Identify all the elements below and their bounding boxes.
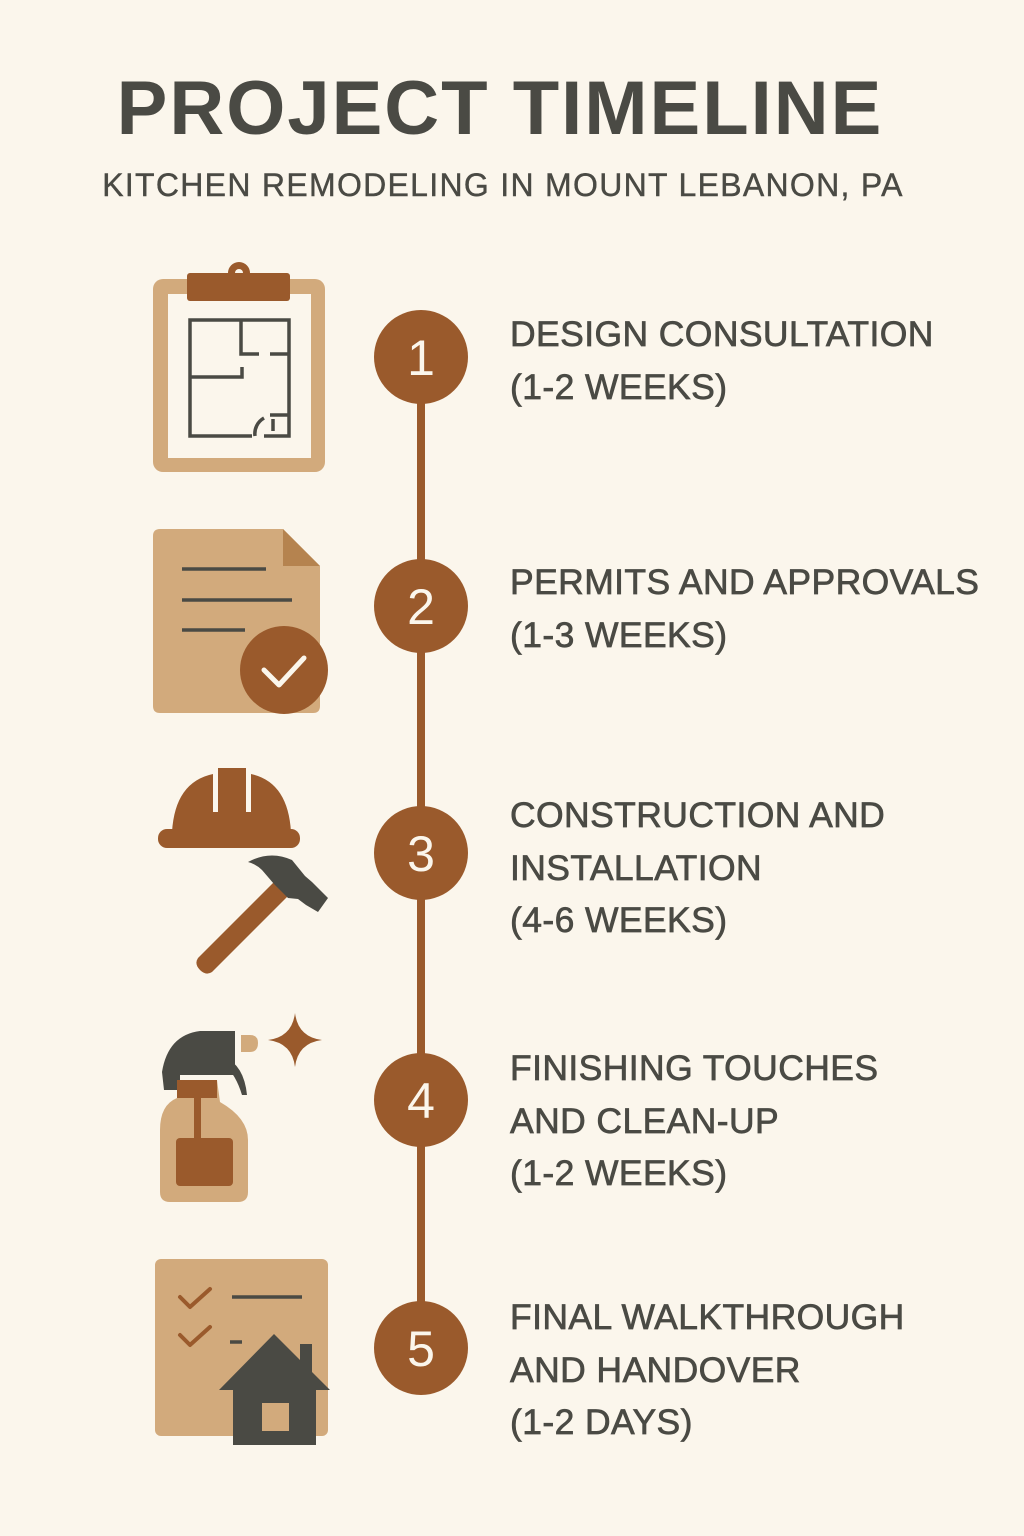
step 1 text: DESIGN CONSULTATION <box>510 314 934 354</box>
step 5 text: AND HANDOVER <box>510 1350 801 1390</box>
step 5 text <box>510 1297 905 1442</box>
icon: clipboard floor plan <box>153 262 325 472</box>
step 3 text: CONSTRUCTION AND <box>510 795 885 835</box>
step 1 text <box>510 314 934 407</box>
step circles: 4 <box>407 1073 435 1129</box>
step 2 text: PERMITS AND APPROVALS <box>510 562 979 602</box>
step 2 text: (1-3 WEEKS) <box>510 614 727 654</box>
step 4 text: FINISHING TOUCHES <box>510 1048 878 1088</box>
icon: hard hat and hammer <box>158 768 328 974</box>
step circles: 3 <box>407 826 435 882</box>
step 5 text: FINAL WALKTHROUGH <box>510 1297 905 1337</box>
subtitle: KITCHEN REMODELING IN MOUNT LEBANON, PA <box>102 167 904 203</box>
step 4 text: (1-2 WEEKS) <box>510 1153 727 1193</box>
step circles: 1 <box>407 330 435 386</box>
step circles: 2 <box>407 579 435 635</box>
step 3 text: INSTALLATION <box>510 848 762 888</box>
step 3 text: (4-6 WEEKS) <box>510 900 727 940</box>
step circles <box>374 310 468 1395</box>
icon: permit document <box>153 529 328 714</box>
icon: checklist with house <box>155 1259 330 1445</box>
icon: spray bottle and sparkle <box>160 1013 322 1202</box>
timeline line <box>417 357 425 1348</box>
step 2 text <box>510 562 979 655</box>
step 4 text <box>510 1048 878 1193</box>
step 4 text: AND CLEAN-UP <box>510 1100 779 1140</box>
step circles: 5 <box>407 1321 435 1377</box>
title: PROJECT TIMELINE <box>117 66 883 151</box>
step 5 text: (1-2 DAYS) <box>510 1402 693 1442</box>
step 3 text <box>510 795 885 940</box>
step 1 text: (1-2 WEEKS) <box>510 366 727 406</box>
